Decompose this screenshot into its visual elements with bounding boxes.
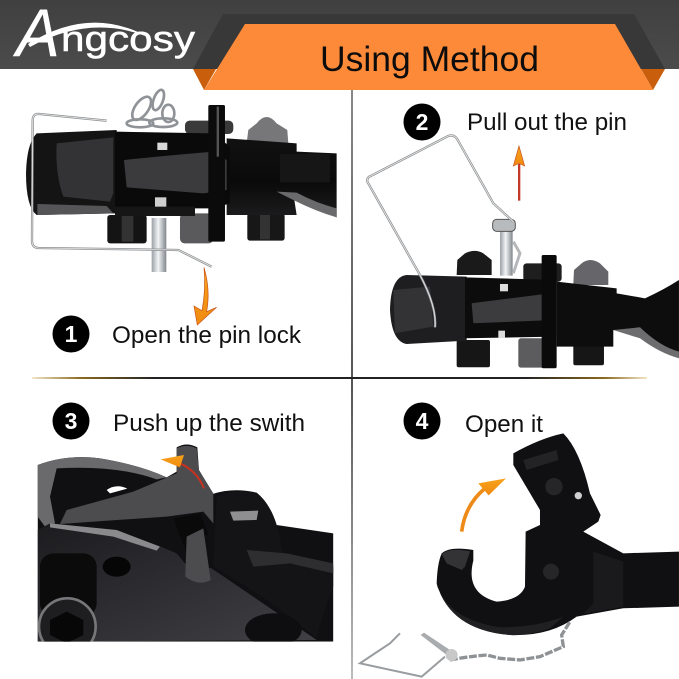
wire lock (32, 114, 212, 267)
photo: hitch with pin lock closed (26, 88, 337, 272)
pin (500, 227, 513, 276)
vertical divider (351, 90, 353, 679)
panel: step 4 (360, 402, 679, 677)
pin chain (513, 242, 520, 273)
photo: close-up of switch (38, 444, 333, 655)
horizontal divider (32, 377, 647, 379)
wire lock (367, 135, 513, 327)
arrow: push up switch (161, 455, 204, 488)
lower bump (245, 613, 302, 642)
title: Using Method (320, 40, 539, 79)
title ribbon (193, 14, 665, 90)
arrow: pull the lock down (194, 267, 217, 325)
step 3 badge (52, 402, 90, 440)
pin (152, 218, 166, 272)
small screw (103, 557, 131, 577)
step 4 badge: 4 (416, 408, 429, 434)
step 4 badge (404, 402, 440, 440)
step 1 badge (52, 316, 90, 352)
logo swoosh (28, 23, 148, 47)
step 3 label: Push up the swith (113, 410, 305, 437)
chain (450, 622, 570, 660)
header band (0, 0, 679, 90)
panel: step 1 (26, 88, 337, 353)
photo: opened hook (360, 433, 679, 677)
ribbon shadow (193, 14, 665, 69)
brand logo (12, 0, 195, 71)
logo wordmark: ngcosy (61, 18, 195, 59)
loose pin (421, 633, 450, 655)
step 1 label: Open the pin lock (112, 322, 302, 349)
step 3 badge: 3 (65, 408, 77, 434)
chain (127, 88, 177, 127)
right shoulder (265, 502, 334, 588)
switch lower pin (185, 528, 211, 583)
arrow: pull up (513, 146, 525, 201)
wire lock (360, 633, 445, 677)
step 2 label: Pull out the pin (467, 109, 627, 136)
left fold (193, 69, 216, 90)
step 2 badge: 2 (416, 109, 428, 135)
step 2 badge (404, 104, 440, 140)
photo: hitch with pin pulled out (367, 135, 679, 368)
ribbon face (204, 24, 653, 90)
pin head (493, 219, 515, 231)
step 1 badge: 1 (65, 321, 78, 347)
panel: step 3 (38, 402, 333, 655)
socket head bolt (40, 553, 97, 617)
header background (0, 0, 679, 69)
right fold (641, 69, 665, 90)
panel: step 2 (367, 104, 679, 368)
arrow: hook opening (462, 478, 506, 532)
shaft lower highlight (277, 192, 337, 217)
step 4 label: Open it (465, 411, 543, 438)
